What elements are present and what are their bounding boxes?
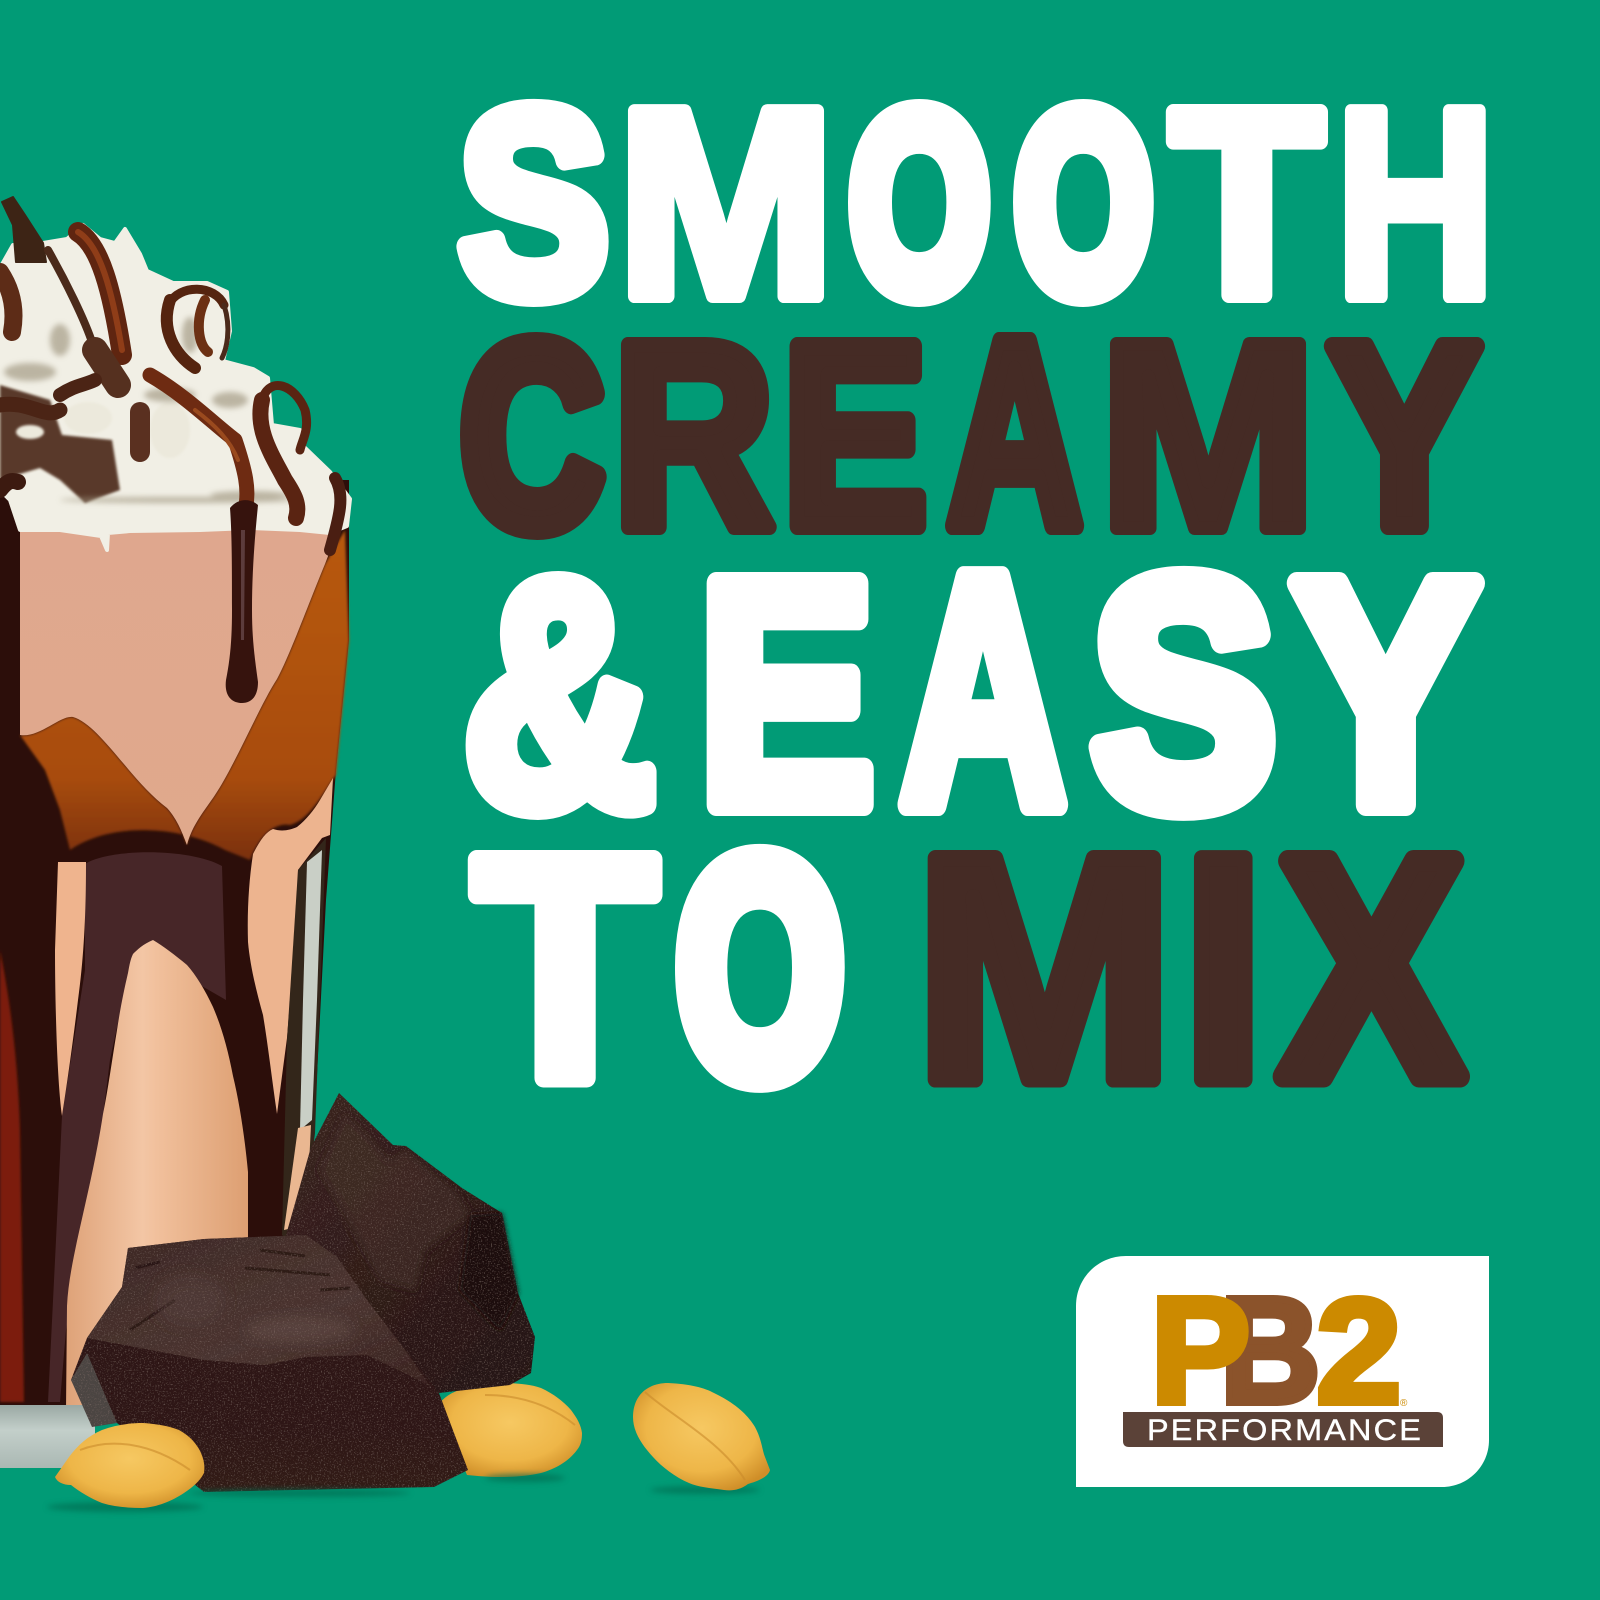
line: SMOOTH: O [1015,59,1152,346]
peanut right [633,1383,770,1490]
line: TO [473,791,843,1146]
performance bar [1123,1412,1443,1447]
PB2 wordmark [1151,1266,1401,1434]
line: & EASY: E [698,514,875,874]
line: SMOOTH: H [1336,53,1495,354]
cream silhouette [0,225,350,550]
line: MIX: I [1181,790,1265,1149]
cream shadows [4,317,300,503]
drip highlight [241,530,245,640]
PB2 wordmark: P [1151,1266,1250,1434]
peanut left [55,1423,204,1508]
chocolate drizzle strands [0,197,340,550]
peach strip lower [284,1125,311,1230]
icon: back chocolate chunk [286,1093,535,1393]
chunk top face [87,1235,429,1385]
line: CREAMY: E [783,290,927,581]
chocolate drip [226,500,258,703]
PB2 wordmark: 2 [1316,1268,1401,1434]
line: CREAMY: M [1099,286,1317,586]
peanut creases [80,1392,745,1480]
line: SMOOTH: T [1170,54,1323,352]
line: TO: T [473,791,657,1146]
chocolate curtain [48,852,226,1402]
peach window left [55,862,86,1116]
line: SMOOTH: S [459,54,608,350]
red syrup strip [0,950,24,1402]
line: & EASY: & [463,513,656,874]
chunk highlights [245,1316,355,1344]
whipped cream [0,197,350,703]
milk upper section [20,525,340,845]
line: & EASY [463,507,1480,875]
line: MIX [915,789,1464,1149]
line: CREAMY: Y [1328,291,1481,582]
line: MIX: M [915,789,1174,1149]
peanut middle [438,1383,582,1477]
glass foot [0,1405,95,1468]
line: SMOOTH [459,53,1495,354]
glass reflection sliver [282,838,326,1250]
line: & EASY: Y [1292,514,1480,874]
peanut shadows [47,1474,760,1512]
line: MIX: X [1280,794,1464,1144]
line: & EASY: A [900,507,1066,875]
chunk dark fracture [460,1213,518,1330]
peanut group [47,1383,770,1512]
icon: front chocolate chunk [71,1235,468,1492]
line: CREAMY: C [461,290,603,581]
line: & EASY: S [1092,512,1276,874]
line: TO: O [677,797,843,1141]
line: CREAMY: R [613,287,775,583]
milkshake glass [0,480,349,1468]
line: CREAMY: A [947,285,1083,583]
chunk surface marks [130,1250,350,1330]
headline [459,53,1495,1149]
peach window right [248,778,333,1114]
PB2 wordmark: B [1220,1266,1320,1434]
logo card [1076,1256,1489,1487]
performance label: PERFORMANCE [1147,1414,1423,1447]
glass highlight [300,850,322,1130]
brown mottled mass [0,385,120,503]
card background [1076,1256,1489,1487]
registered mark: ® [1400,1398,1408,1409]
chunk side sliver [71,1353,117,1427]
chunk lit facet [320,1115,470,1290]
cream puffs [16,402,190,458]
line: SMOOTH: O [850,60,989,347]
line: SMOOTH: M [617,53,835,354]
peach window centre [66,940,248,1410]
glass body with dark syrup [0,480,349,1410]
line: CREAMY [461,285,1481,586]
caramel syrup band [20,530,349,860]
